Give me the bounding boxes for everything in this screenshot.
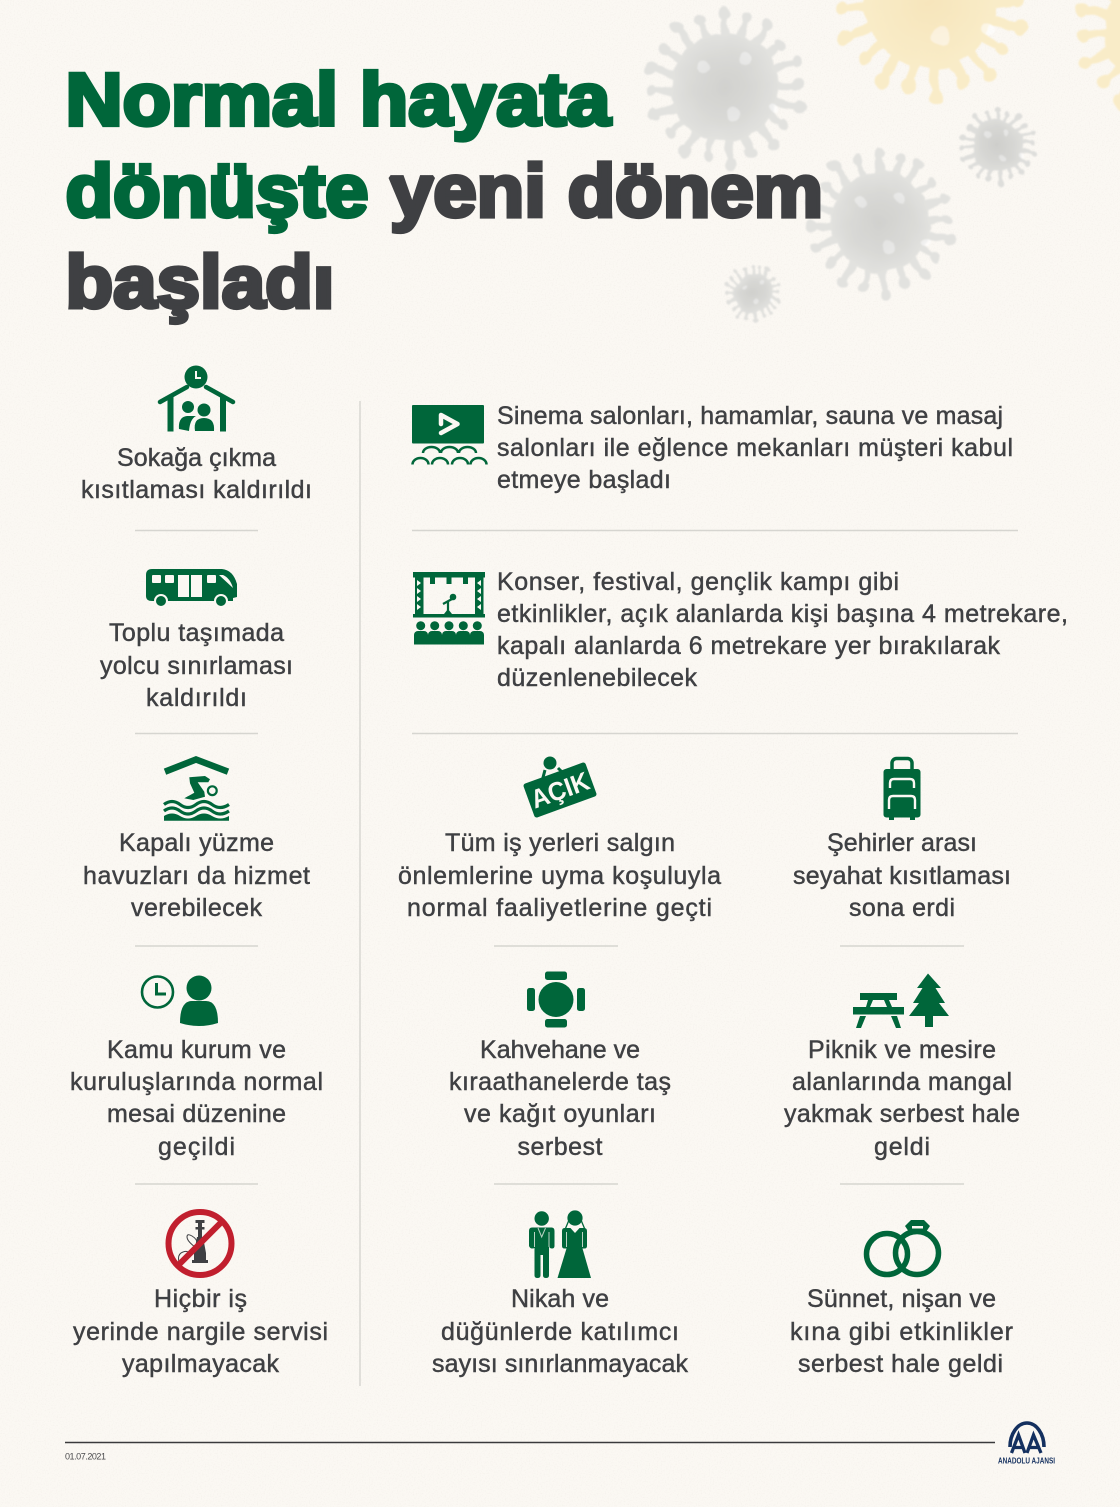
text: coffee houses: Kahvehane ve <box>480 1036 640 1064</box>
text: concerts: kapalı alanlarda 6 metrekare yer bırakılarak <box>497 632 1000 660</box>
text: picnic: alanlarında mangal <box>792 1068 1012 1096</box>
text: ceremonies: serbest hale geldi <box>798 1350 1003 1378</box>
icon: bride and groom <box>529 1210 591 1278</box>
text: coffee houses: ve kağıt oyunları <box>464 1100 656 1128</box>
text: concerts: Konser, festival, gençlik kampı gibi <box>497 568 899 596</box>
date: 01.07.2021 <box>65 1452 106 1462</box>
text: picnic: Piknik ve mesire <box>808 1036 996 1064</box>
text: cinemas <box>497 402 1013 494</box>
text: intercity travel: Şehirler arası <box>827 829 977 857</box>
icon: picnic table and tree <box>853 974 949 1028</box>
text: public transport <box>100 619 293 712</box>
text: public institutions: mesai düzenine <box>107 1100 286 1128</box>
icon: concert stage <box>413 572 485 644</box>
text: intercity travel: sona erdi <box>849 894 955 922</box>
text: picnic: yakmak serbest hale <box>784 1100 1020 1128</box>
text: weddings: sayısı sınırlanmayacak <box>432 1350 688 1378</box>
text: curfew <box>81 444 312 504</box>
text: coffee houses: kıraathanelerde taş <box>449 1068 671 1096</box>
text: weddings: Nikah ve <box>511 1285 609 1313</box>
text: ceremonies <box>790 1285 1013 1378</box>
icon: cafe table <box>527 972 585 1028</box>
icon: suitcase <box>884 758 920 820</box>
text: ceremonies: Sünnet, nişan ve <box>807 1285 996 1313</box>
text: public institutions: geçildi <box>158 1133 235 1161</box>
title: başladı <box>66 240 334 324</box>
icon: cinema screen <box>412 405 486 464</box>
text: picnic <box>784 1036 1020 1161</box>
icon: open sign: AÇIK <box>527 766 594 814</box>
icon: covered pool swimmer <box>164 760 229 821</box>
text: public institutions: kuruluşlarında normal <box>70 1068 323 1096</box>
text: pools: Kapalı yüzme <box>119 829 274 857</box>
text: public institutions <box>70 1036 323 1161</box>
text: workplaces: önlemlerine uyma koşuluyla <box>398 862 721 890</box>
icon: no hookah <box>168 1212 232 1275</box>
logo: Anadolu Ajansı: ANADOLU AJANSI <box>998 1456 1055 1466</box>
icon: bus <box>146 569 237 608</box>
text: cinemas: Sinema salonları, hamamlar, sauna ve masaj <box>497 402 1003 430</box>
text: concerts <box>497 568 1068 692</box>
title: yeni dönem <box>390 150 823 232</box>
text: concerts: düzenlenebilecek <box>497 664 698 692</box>
title: dönüşte <box>66 150 368 232</box>
logo: Anadolu Ajansı <box>998 1423 1055 1466</box>
text: concerts: etkinlikler, açık alanlarda kişi başına 4 metrekare, <box>497 600 1068 628</box>
text: public institutions: Kamu kurum ve <box>107 1036 286 1064</box>
text: coffee houses: serbest <box>518 1133 603 1161</box>
text: workplaces: Tüm iş yerleri salgın <box>445 829 675 857</box>
text: cinemas: salonları ile eğlence mekanları müşteri kabul <box>497 434 1013 462</box>
text: weddings: düğünlerde katılımcı <box>441 1318 679 1346</box>
text: intercity travel <box>793 829 1011 922</box>
text: picnic: geldi <box>874 1133 930 1161</box>
icon: clock and person <box>142 976 218 1026</box>
icon: house with clock and family <box>160 366 233 432</box>
text: weddings <box>432 1285 688 1378</box>
text: coffee houses <box>449 1036 671 1161</box>
text: pools <box>83 829 310 922</box>
text: workplaces <box>398 829 721 922</box>
text: pools: havuzları da hizmet <box>83 862 310 890</box>
title: Normal hayata <box>66 58 611 141</box>
footer line <box>65 1442 995 1444</box>
title <box>66 58 823 324</box>
text: public transport: Toplu taşımada <box>109 619 284 647</box>
text: curfew: Sokağa çıkma <box>117 444 276 472</box>
text: curfew: kısıtlaması kaldırıldı <box>81 476 312 504</box>
icon: rings <box>866 1220 938 1274</box>
text: ceremonies: kına gibi etkinlikler <box>790 1318 1013 1346</box>
decorative virus particles <box>644 0 1120 323</box>
text: hookah: yapılmayacak <box>122 1350 280 1378</box>
text: public transport: kaldırıldı <box>146 684 247 712</box>
text: cinemas: etmeye başladı <box>497 466 671 494</box>
text: hookah: Hiçbir iş <box>154 1285 247 1313</box>
text: hookah <box>73 1285 328 1378</box>
text: workplaces: normal faaliyetlerine geçti <box>407 894 712 922</box>
text: public transport: yolcu sınırlaması <box>100 652 293 680</box>
text: pools: verebilecek <box>131 894 262 922</box>
text: intercity travel: seyahat kısıtlaması <box>793 862 1011 890</box>
text: hookah: yerinde nargile servisi <box>73 1318 328 1346</box>
